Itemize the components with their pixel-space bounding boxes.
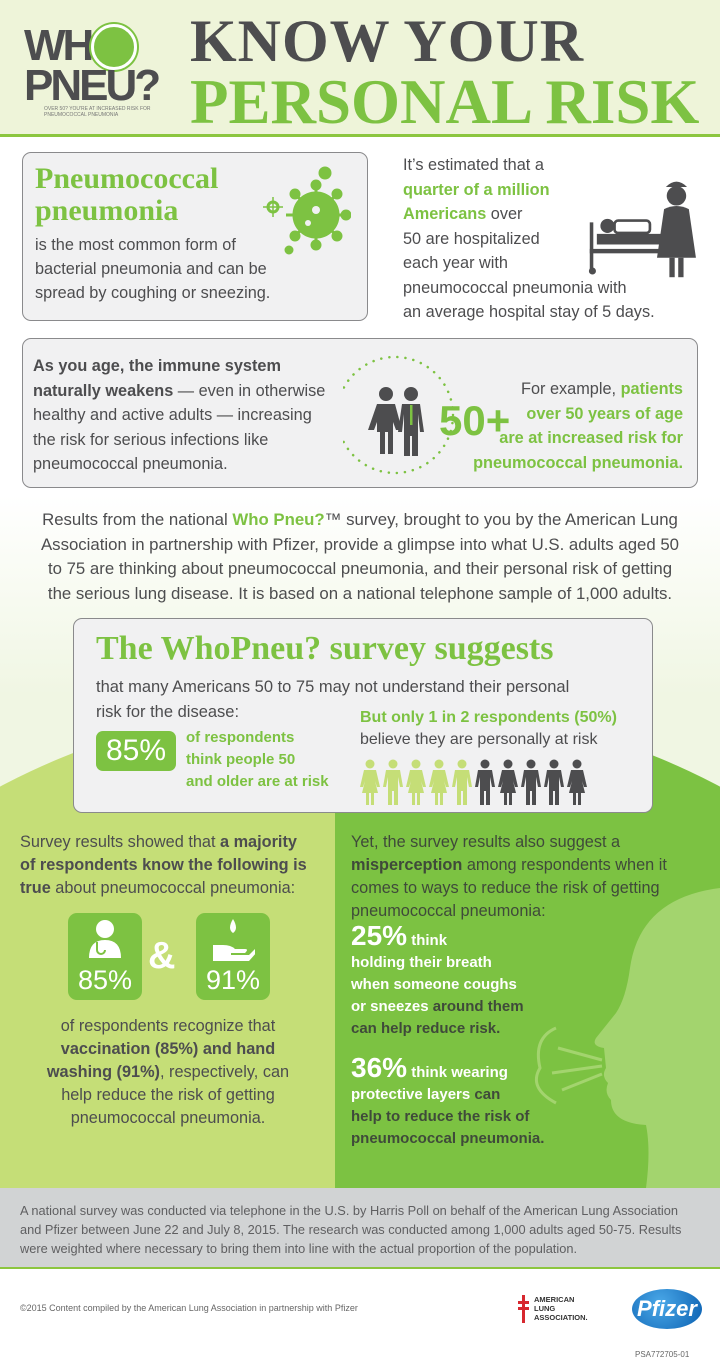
heading: [35, 162, 218, 227]
text block: intro paragraph: the serious lung disease. It is based on a national telephone sample of 1,000 adults.: [48, 584, 672, 602]
text block: majority know: true about pneumococcal pneumonia:: [20, 879, 295, 897]
icon: doctor 85%: [68, 913, 142, 1000]
stat: 25%: or sneezes around them: [351, 998, 524, 1015]
text block: misperception: comes to ways to reduce the risk of getting: [351, 879, 660, 897]
text block: methodology band: were weighted where necessary to bring them into line with the actual proportion of the population.: [20, 1241, 577, 1256]
text block: intro paragraph: Association in partnership with Pfizer, provide a glimpse into what U.S. adults aged 50: [41, 534, 679, 554]
text block: intro paragraph: [41, 510, 679, 602]
text: 85% label: [186, 729, 329, 790]
text: spread by coughing or sneezing.: [35, 284, 270, 302]
text block: misperception: pneumococcal pneumonia:: [351, 902, 546, 920]
text block: misperception: Yet, the survey results also suggest a: [351, 833, 620, 851]
text block: methodology band: A national survey was conducted via telephone in the U.S. by Harris Poll on behalf of the American Lung Association: [20, 1203, 678, 1218]
icon: hand washing 91%: [196, 913, 270, 1000]
text block: methodology band: and Pfizer between June 22 and July 8, 2015. The research was conducted among 1,000 adults aged 50-75. Results: [20, 1222, 681, 1237]
text block: hospitalization: an average hospital stay of 5 days.: [403, 303, 655, 321]
icon: couple with dotted circle and 50+: 50+: [439, 397, 510, 444]
text: patients over 50: are at increased risk for: [499, 429, 683, 447]
icon: american lung association logo: [518, 1295, 588, 1323]
text: vaccination and hand washing: help reduce the risk of getting: [61, 1086, 275, 1104]
text: vaccination and hand washing: [46, 1017, 289, 1127]
text block: hospitalization: 50 are hospitalized: [403, 230, 540, 248]
icon: ten people: [360, 760, 587, 805]
text: pneumococcal pneumonia.: [33, 455, 228, 473]
stat: 85%: 85%: [106, 734, 166, 767]
text: 85% label: of respondents: [186, 729, 294, 746]
text block: hospitalization: [403, 156, 655, 321]
text: [33, 357, 325, 473]
text block: majority know: of respondents know the following is: [20, 856, 307, 874]
text block: hospitalization: It’s estimated that a: [403, 156, 544, 174]
stat: 36%: help to reduce the risk of: [351, 1108, 529, 1125]
heading: Pneumococcal: [35, 162, 218, 195]
icon: american lung association logo: AMERICAN: [534, 1295, 574, 1304]
text: vaccination and hand washing: pneumococcal pneumonia.: [71, 1109, 265, 1127]
text: vaccination and hand washing: washing (91%), respectively, can: [47, 1063, 289, 1081]
footer text: ©2015 Content compiled by the American Lung Association in partnership with Pfizer: [20, 1303, 358, 1313]
text: patients over 50: pneumococcal pneumonia.: [473, 454, 683, 472]
text: patients over 50: over 50 years of age: [526, 404, 683, 422]
title: KNOW YOUR: [190, 8, 584, 74]
icon: head silhouette sneezing: [535, 888, 720, 1188]
text: 85% label: think people 50: [186, 751, 295, 768]
icon: germ: [263, 166, 351, 254]
icon: doctor 85%: 85%: [78, 965, 132, 995]
text: 1 in 2: But only 1 in 2 respondents (50%): [360, 709, 617, 726]
header band: [0, 0, 720, 137]
text: healthy and active adults — increasing: [33, 406, 312, 424]
icon: pfizer logo: [632, 1289, 702, 1329]
text: naturally weakens — even in otherwise: [33, 382, 325, 400]
heading: The WhoPneu? survey suggests: [96, 630, 554, 667]
text block: majority know: Survey results showed that a majority: [20, 833, 297, 851]
text: is the most common form of: [35, 236, 236, 254]
panel: immune system / 50+: [22, 338, 698, 488]
text block: hospitalization: Americans over: [403, 205, 522, 223]
text: bacterial pneumonia and can be: [35, 260, 267, 278]
text: vaccination and hand washing: vaccination (85%) and hand: [61, 1040, 275, 1058]
panel: survey suggests: [73, 618, 653, 813]
stat: 25%: 25% think: [351, 920, 447, 951]
logo: PNEU?: [24, 61, 158, 110]
logo: [24, 21, 159, 118]
text block: hospitalization: pneumococcal pneumonia with: [403, 278, 627, 296]
logo: OVER 50? YOU'RE AT INCREASED RISK FOR PNEUMOCOCCAL PNEUMONIA: [44, 106, 151, 118]
title: [190, 8, 699, 137]
stat: 25%: holding their breath: [351, 954, 492, 971]
stat: 85%: [96, 731, 176, 771]
text block: misperception: [351, 833, 667, 920]
stat: 36%: protective layers can: [351, 1086, 500, 1103]
icon: hand washing 91%: 91%: [206, 965, 260, 995]
stat: 36%: 36% think wearing: [351, 1052, 508, 1083]
text: patients over 50: [473, 380, 683, 472]
icon: ampersand: &: [148, 935, 175, 977]
text: vaccination and hand washing: of respondents recognize that: [61, 1017, 275, 1035]
text block: misperception: misperception among respondents when it: [351, 856, 667, 874]
background: gradient + green arcs: [0, 495, 720, 1195]
stat: 36%: [351, 1052, 544, 1147]
text block: hospitalization: quarter of a million: [403, 180, 550, 198]
stat: 25%: can help reduce risk.: [351, 1020, 500, 1037]
stat: 36%: pneumococcal pneumonia.: [351, 1130, 544, 1147]
icon: american lung association logo: LUNG: [534, 1304, 555, 1313]
icon: hospital bed and nurse: [588, 182, 696, 278]
icon: couple with dotted circle and 50+: [343, 356, 510, 474]
stat: 25%: [351, 920, 524, 1037]
text: As you age, the immune system: [33, 357, 281, 375]
text: that many Americans 50 to 75 may not understand their personal: [96, 678, 569, 696]
text: [96, 678, 569, 720]
logo: WH: [24, 21, 91, 70]
text block: hospitalization: each year with: [403, 254, 508, 272]
text block: methodology band: [0, 1188, 720, 1269]
text: risk for the disease:: [96, 702, 239, 720]
text: 1 in 2: believe they are personally at risk: [360, 731, 597, 748]
text block: intro paragraph: Results from the national Who Pneu?™ survey, brought to you by the American Lung: [42, 510, 678, 529]
panel: pneumococcal definition: [22, 152, 368, 321]
text: patients over 50: For example, patients: [521, 380, 683, 398]
stat: 25%: when someone coughs: [351, 976, 517, 993]
text: the risk for serious infections like: [33, 430, 268, 448]
footer code: PSA772705-01: [635, 1350, 689, 1359]
heading: pneumonia: [35, 194, 178, 227]
text: [35, 236, 270, 302]
icon: pfizer logo: Pfizer: [637, 1296, 697, 1321]
text block: intro paragraph: to 75 are thinking about pneumococcal pneumonia, and their personal risk of getting: [48, 559, 672, 578]
text block: majority know: [20, 833, 307, 897]
text: 1 in 2: [360, 709, 617, 748]
icon: american lung association logo: ASSOCIATION.: [534, 1313, 588, 1322]
text: 85% label: and older are at risk: [186, 773, 329, 790]
title: PERSONAL RISK: [190, 67, 699, 137]
